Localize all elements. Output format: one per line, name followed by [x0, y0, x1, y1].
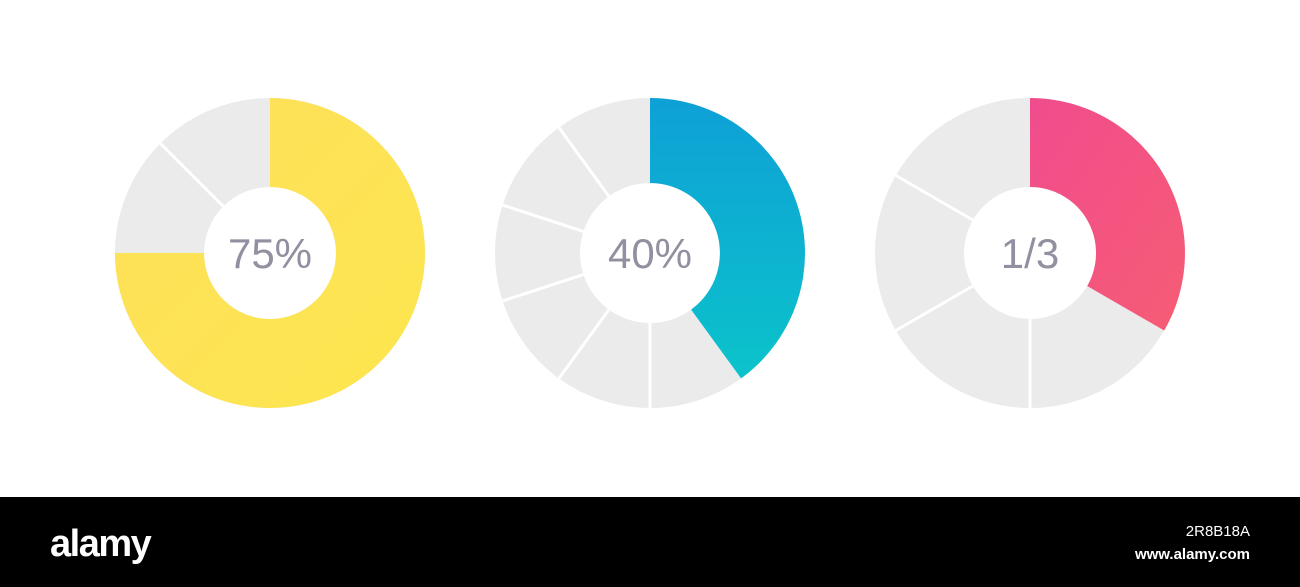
footer id: 2R8B18A	[1186, 523, 1250, 540]
chart: 1/3 donut	[896, 98, 1185, 408]
chart: 40% donut	[503, 98, 805, 408]
label: 40%: 40%	[608, 230, 692, 277]
label: 1/3: 1/3	[1001, 230, 1059, 277]
footer url: www.alamy.com	[1134, 546, 1250, 563]
footer logo: alamy	[50, 523, 152, 565]
footer bar	[0, 497, 1300, 587]
label: 75%: 75%	[228, 230, 312, 277]
chart: 75% donut	[115, 98, 425, 408]
